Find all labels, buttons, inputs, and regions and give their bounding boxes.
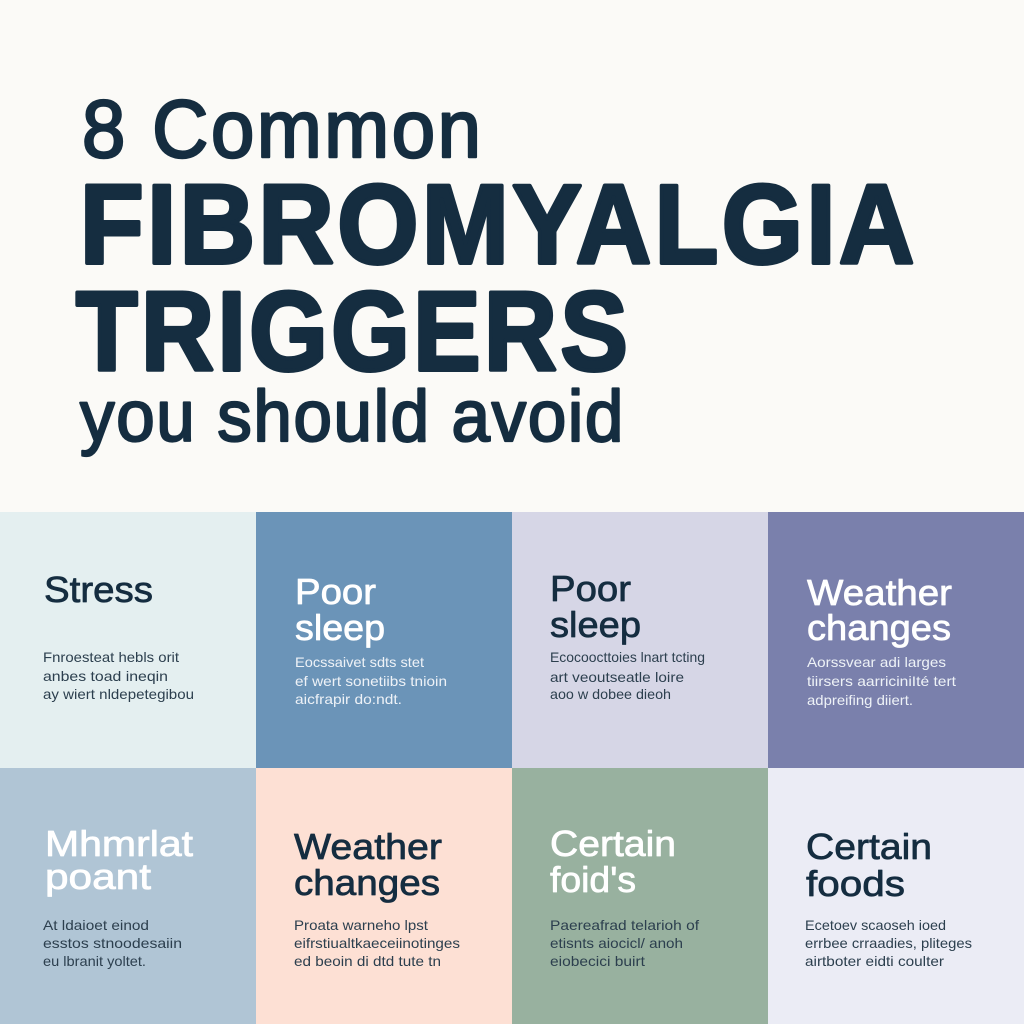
panel: poor sleep lavender: sleep bbox=[550, 604, 641, 645]
panel: poor sleep lavender: aoo w dobee dieoh bbox=[550, 686, 671, 702]
panel: poor sleep lavender: Poor bbox=[550, 568, 631, 609]
panel: certain foids green bbox=[512, 768, 768, 1024]
panel: certain foids green: foid's bbox=[550, 859, 636, 900]
panel: weather changes peach: eifrstiualtkaeceiinotinges bbox=[294, 935, 460, 951]
panel: mhmrlat poant: At ldaioet einod bbox=[43, 917, 149, 933]
panel: certain foods pale: Ecetoev scaoseh ioed bbox=[805, 917, 946, 933]
panel: mhmrlat poant: esstos stnoodesaiin bbox=[43, 935, 182, 951]
panel: mhmrlat poant bbox=[0, 768, 256, 1024]
panel: poor sleep blue: sleep bbox=[295, 607, 385, 648]
panel: weather changes purple bbox=[768, 512, 1024, 768]
panel: stress: anbes toad ineqin bbox=[43, 668, 168, 684]
panel: weather changes purple: adpreifing diiert. bbox=[807, 692, 913, 708]
panel: poor sleep blue: ef wert sonetiibs tnioin bbox=[295, 673, 447, 689]
panel: poor sleep blue: aicfrapir do:ndt. bbox=[295, 691, 402, 707]
panel: certain foods pale: airtboter eidti coulter bbox=[805, 953, 944, 969]
panel: weather changes purple: changes bbox=[807, 607, 951, 648]
panel: poor sleep blue: Eocssaivet sdts stet bbox=[295, 654, 424, 670]
panel: certain foods pale bbox=[768, 768, 1024, 1024]
panel: stress: ay wiert nldepetegibou bbox=[43, 686, 194, 702]
panel: poor sleep lavender bbox=[512, 512, 768, 768]
panel: certain foids green: etisnts aiocicl/ anoh bbox=[550, 935, 683, 951]
panel: stress: Fnroesteat hebls orit bbox=[43, 649, 179, 665]
panel: certain foods pale: foods bbox=[806, 863, 905, 904]
panel: mhmrlat poant: Mhmrlat bbox=[45, 823, 193, 864]
panel: poor sleep lavender: Ecocoocttoies lnart tcting bbox=[550, 649, 705, 665]
panel: certain foids green: Certain bbox=[550, 823, 676, 864]
title: 8 Common bbox=[82, 83, 481, 174]
panel: weather changes peach bbox=[256, 768, 512, 1024]
panel: poor sleep lavender: art veoutseatle loire bbox=[550, 669, 684, 685]
panel: certain foods pale: Certain bbox=[806, 826, 932, 867]
title bbox=[76, 83, 914, 456]
panel: poor sleep blue: Poor bbox=[295, 571, 376, 612]
panel: stress bbox=[0, 512, 256, 768]
panel: certain foids green: eiobecici buirt bbox=[550, 953, 645, 969]
panel: poor sleep blue bbox=[256, 512, 512, 768]
panel: weather changes peach: Proata warneho lpst bbox=[294, 917, 428, 933]
panel: mhmrlat poant: poant bbox=[45, 856, 151, 897]
title: you should avoid bbox=[80, 376, 623, 456]
panel: certain foods pale: errbee crraadies, pliteges bbox=[805, 935, 972, 951]
panel: mhmrlat poant: eu lbranit yoltet. bbox=[43, 953, 146, 969]
panel: certain foids green: Paereafrad telarioh of bbox=[550, 917, 699, 933]
panel: stress: Stress bbox=[44, 569, 153, 610]
panel: weather changes peach: Weather bbox=[294, 826, 442, 867]
panel: weather changes peach: ed beoin di dtd tute tn bbox=[294, 953, 441, 969]
title: FIBROMYALGIA bbox=[80, 162, 914, 287]
panel: weather changes peach: changes bbox=[294, 862, 440, 903]
panel: weather changes purple: Aorssvear adi larges bbox=[807, 654, 946, 670]
panel: weather changes purple: tiirsers aarriciniIté tert bbox=[807, 673, 956, 689]
panel: weather changes purple: Weather bbox=[807, 572, 952, 613]
title: TRIGGERS bbox=[76, 269, 628, 394]
